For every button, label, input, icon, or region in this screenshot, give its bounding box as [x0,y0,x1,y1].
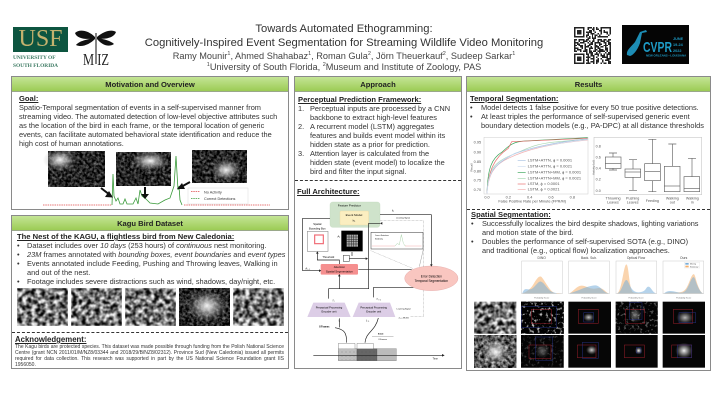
activity plot: Correct Detections [375,234,389,237]
encoder 2: Perceptual Processing [360,306,387,310]
diagram: architecture: Learning Signal [397,308,411,310]
charts: density plots: Ours [680,256,688,260]
attention unit [321,264,358,275]
chart: activity IoU box plot: Throwing [605,196,621,200]
attention unit: Attention [334,265,345,269]
text: goal: high cost of human annotations. [19,139,124,148]
chart: recall vs false positive rate: LSTM, ϕ = 0.0001 [528,181,560,186]
text: perceptual prediction framework: 3. [298,149,304,158]
logo: USF [13,26,68,69]
authors [173,50,516,72]
chart: activity IoU box plot: 0.2 [596,178,601,182]
diagram: architecture: Iₜ [339,318,340,322]
text: kagu bullets: • [17,277,20,286]
panel: motivation and overview [11,76,289,210]
chart: recall vs false positive rate: 0.8 [570,195,575,199]
heading: results [467,77,710,92]
text: kagu bullets: • [17,259,20,268]
legend [188,188,248,204]
text: kagu bullets: • [17,241,20,250]
logo: CVPR 2022 [622,25,689,64]
activity plot [371,232,423,249]
chart: activity IoU box plot: 0.6 [596,156,601,160]
chart: recall vs false positive rate: LSTM+ATTN+MM, ϕ = 0.0001 [528,169,582,174]
chart: recall vs false positive rate: LSTM+ATTN+MM, ϕ = 0.0021 [528,175,582,180]
logo: CVPR 2022: JUNE [673,37,684,41]
text: perceptual prediction framework: Attention layer is calculated from the [310,149,429,158]
text: perceptual prediction framework: 1. [298,104,304,113]
heading: kagu [12,216,288,231]
chart: activity IoU box plot [592,137,702,205]
error detection: Temporal Segmentation [415,279,448,283]
text: perceptual prediction framework: 2. [298,122,304,131]
attention map: Aₜ [337,235,340,239]
chart: recall vs false positive rate: 0.2 [506,195,511,199]
error detection: Error Detection [421,274,442,278]
text: kagu bullets: Dataset includes over 10 days (253 hours) of continuous nest monitoring. [27,241,267,250]
charts: density plots: Stationary [690,265,698,268]
image grid: localization results [474,302,705,368]
text: spatial segmentation: • [471,219,474,228]
text: goal: Goal: [19,94,38,103]
text: perceptual prediction framework: Perceptual Prediction Framework: [298,94,421,104]
chart: recall vs false positive rate: 0.4 [527,195,533,199]
charts: density plots: Probability Score [628,297,644,300]
chart: recall vs false positive rate: 0.85 [474,160,481,164]
chart: recall vs false positive rate: 0.75 [474,179,481,183]
chart: activity IoU box plot: Leaves [607,201,619,205]
text: spatial segmentation: and motion state of the bird. [482,228,574,237]
feature predictor: Feature Predictor [338,204,361,208]
connecting arrows [303,215,431,299]
text: perceptual prediction framework: bird and filter the input signal. [310,167,407,176]
chart: activity IoU box plot: Feeding [646,199,659,203]
frame stacks: Stride [378,333,384,336]
text: spatial segmentation: and traditional (e.g., optical flow) localization approaches. [482,246,670,255]
panel: results [466,76,711,371]
chart: recall vs false positive rate: 0.6 [548,195,554,199]
logo: CVPR 2022: 2022 [673,49,681,53]
encoder 2: Encoder unit [366,310,381,314]
text: goal: Spatio-Temporal segmentation of events in a self-supervised manner from [19,103,261,112]
chart: recall vs false positive rate: 0.0 [484,195,490,199]
bounding box: Spatial [313,222,322,226]
charts: density plots: Probability Score [534,297,550,300]
text: perceptual prediction framework: A recurrent model (LSTM) aggregates [310,122,434,131]
legend: No Activity [204,190,222,194]
diagram: architecture: λₗₒₛₛ ∂Eₜ/∂θₜ [399,316,409,319]
chart: activity IoU box plot: 0.8 [596,144,601,148]
text: perceptual prediction framework: features and builds event model within its [310,131,445,140]
frame 2 [116,151,171,186]
chart: recall vs false positive rate: False Positive Rate per Minute (FPR/M) [498,199,567,203]
chart: recall vs false positive rate: 0.90 [474,150,481,154]
text: perceptual prediction framework [298,94,450,176]
feature predictor: h₁ [353,218,355,222]
text: perceptual prediction framework: hidden state (event model) to localize the [310,158,445,167]
chart: recall vs false positive rate: 0.80 [474,169,481,173]
encoder 1 [307,303,351,317]
chart: activity IoU box plot: 0.4 [596,167,601,171]
text: spatial segmentation [471,210,698,255]
text: temporal segmentation: Model detects 1 false positive for every 50 true positive detections. [481,103,699,112]
text: spatial segmentation: Spatial Segmentation: [471,210,551,219]
frame 3 [192,150,247,183]
charts: density plots: Moving [690,264,696,266]
encoder 2 [353,303,395,317]
chart: activity IoU box plot: out [670,201,675,205]
title [145,23,543,49]
chart: recall vs false positive rate: Recall [469,163,473,172]
text: kagu bullets: Footage includes severe distractions such as wind, shadows, day/night, etc. [27,277,275,286]
diagram: architecture: ŝₜ [392,209,394,213]
text: temporal segmentation: Temporal Segmentation: [470,94,558,103]
text: temporal segmentation: • [470,103,473,112]
logo: MIZ dragonfly [75,30,116,68]
charts: density plots: Probability Score [676,297,692,300]
chart: recall vs false positive rate: LSTM+ATTN, ϕ = 0.0001 [528,157,573,162]
heading: approach: Approach [360,80,396,89]
attention unit: Spatial Segmentation [326,270,353,274]
QR code [574,27,611,64]
heading: motivation: Motivation and Overview [105,80,195,89]
logo: CVPR 2022: NEW ORLEANS • LOUISIANA [646,54,687,58]
text: spatial segmentation: Successfully localizes the bird despite shadows, lighting variations [482,219,698,228]
charts: density plots: DINO [538,256,546,260]
text: goal: as the location of the bird in each frame, or the temporal location of generic [19,121,264,130]
heading: results: Results [575,80,602,89]
chart: activity IoU box plot: Leaves [627,201,639,205]
chart: recall vs false positive rate: LSTM, ϕ = 0.0021 [528,187,560,192]
text: goal: events, can facilitate automated behavioral state identification and reduce the [19,130,272,139]
authors: 1University of South Florida, 2Museum and Institute of Zoology, PAS [207,61,481,72]
frame 1 [43,149,105,187]
text: temporal segmentation: • [470,112,473,121]
error detection [405,266,458,291]
text: kagu bullets: • [17,250,20,259]
text: kagu bullets: The Nest of the KAGU, a flightless bird from New Caledonia: [17,232,234,241]
heading: full architecture: Full Architecture: [297,187,360,196]
frame stacks: 8 Frames [319,326,330,328]
bounding box [307,222,328,251]
text: spatial segmentation: Doubles the performance of self-supervised SOTA (e.g., DINO) [482,237,688,246]
frame stacks: Time [433,358,438,360]
chart: recall vs false positive rate: LSTM+ATTN, ϕ = 0.0021 [528,163,573,168]
image strip: kagu frames [17,288,284,326]
logo: CVPR 2022: 19-24 [673,43,684,47]
legend: Correct Detections [204,197,236,201]
charts: density plots [522,256,704,300]
encoder 1: Encoder unit [322,310,337,314]
charts: density plots: Probability Score [581,297,597,300]
charts: density plots: Back. Sub. [581,256,597,260]
chart: recall vs false positive rate: 0.95 [474,140,481,144]
attention map: Threshold [322,255,335,259]
diagram: architecture: Iₜ₊₁ [366,320,370,322]
logo: CVPR 2022: CVPR [643,39,672,56]
chart: activity IoU box plot: Pushing [626,196,639,200]
chart: recall vs false positive rate: 0.70 [474,188,481,192]
text: perceptual prediction framework: hidden state as a prior for prediction. [310,140,430,149]
heading: motivation [12,77,288,92]
chart: activity with frames [43,150,270,206]
arrows [101,182,190,199]
activity plot: No Activity [375,237,383,240]
text: goal: streaming video. The automated detection of low-level objective attributes such [19,112,277,121]
attention map [322,231,363,261]
text: acknowledgement: Acknowledgement: [15,335,86,344]
heading: approach [295,77,461,92]
text: kagu bullets: Events annotated include Feeding, Pushing and Throwing leaves, Walking in [27,259,278,268]
text: perceptual prediction framework: Perceptual inputs are processed by a CNN [310,104,450,113]
authors: Ramy Mounir1, Ahmed Shahabaz1, Roman Gula2, Jörn Theuerkauf2, Sudeep Sarkar1 [173,50,515,60]
text: perceptual prediction framework: backbone to extract high-level features [310,113,437,122]
text: temporal segmentation: At least triples the performance of self-supervised generic event [481,112,690,121]
frame stacks: 8 Frames [378,339,387,341]
logo: USF: SOUTH FLORIDA [13,63,58,69]
diagram: architecture: I'ₜ₊₁ [377,297,381,301]
chart: recall vs false positive rate [469,137,588,204]
panel: approach [294,76,462,369]
text: acknowledgement: The Kagu birds are protected species. This dataset was made possible through funding from the Polish National Science Centre (grant NCN 2011/01/M/NZ8/03344 and 2018/29/B/NZ8/02312). Province Sud (New Caledonia) issued all permits required for data collection. This research was supported in part by the US National Science Foundation grant IIS 1956050. [15,344,284,368]
chart: activity IoU box plot: in [691,201,694,205]
chart: activity IoU box plot: Walking [666,196,679,200]
heading: kagu: Kagu Bird Dataset [117,219,183,228]
logo: USF: UNIVERSITY OF [13,55,55,61]
text: kagu bullets: and out of the nest. [27,268,90,277]
text: spatial segmentation: • [471,237,474,246]
diagram: architecture [302,202,458,361]
title: Towards Automated Ethogramming: [255,23,433,35]
diagram: architecture: I'ₜ [333,298,335,302]
panel: kagu bird dataset [11,215,289,369]
diagram: architecture: Learning Signal [396,217,410,219]
text: temporal segmentation: boundary detection models (e.g., PA-DPC) at all distance thresholds [481,121,704,130]
title: Cognitively-Inspired Event Segmentation for Streaming Wildlife Video Monitoring [145,37,543,49]
logo: USF: USF [18,26,63,52]
text: goal [19,94,277,148]
text: kagu bullets [17,232,286,286]
frame stacks [313,318,445,361]
feature predictor: Event Model [346,213,363,217]
encoder 1: Perceptual Processing [316,306,343,310]
feature predictor [330,202,380,227]
text: kagu bullets: 23M frames annotated with bounding boxes, event boundaries and event types [27,250,285,259]
text: temporal segmentation [470,94,704,130]
charts: density plots: Optical Flow [627,256,646,260]
chart: activity IoU box plot: Walking [686,196,699,200]
chart: activity IoU box plot: 0.0 [596,189,601,193]
bounding box: Bounding Box [309,226,326,230]
diagram: architecture: Aₜ₋₁ [305,266,310,270]
